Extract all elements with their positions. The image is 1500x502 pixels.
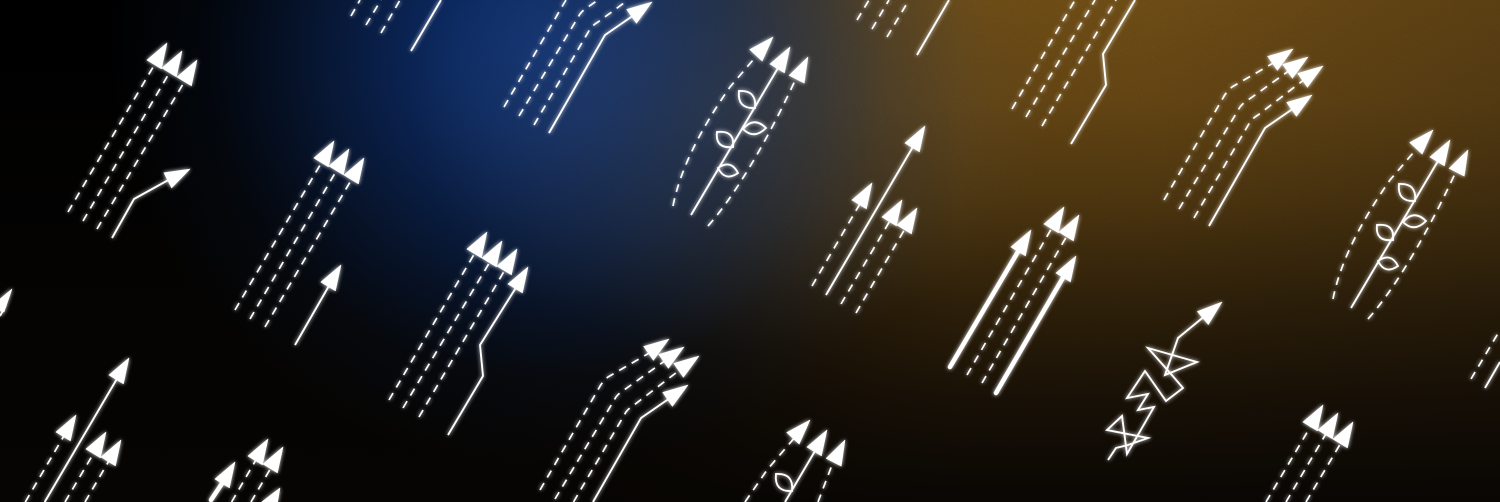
arrow group: two thick solid arrows with dashed lanes <box>950 203 1086 393</box>
arrow group: leaf stem with curved dashed lanes, right <box>1333 124 1476 319</box>
arrow group: lanes at right edge <box>1471 330 1500 388</box>
arrow group: curving lanes, top centre <box>504 0 657 133</box>
arrow group: curving lanes, bottom centre <box>540 332 704 502</box>
arrow: tangled zigzag line ending in arrowhead <box>1107 295 1227 460</box>
arrow group: long solid arrow among dashed lanes, bottom left <box>25 354 136 502</box>
arrow group: curving lanes, right <box>1164 42 1328 226</box>
arrow group: long solid arrow among dashed lanes, centre right <box>812 122 932 313</box>
arrow group: top edge dashed lanes with kinked solid line <box>1012 0 1135 144</box>
arrow group: top edge lanes near x=400 <box>351 0 441 51</box>
arrow group: leaf stem with curved dashed lanes, bottom <box>745 414 853 502</box>
arrow group: thick arrows at bottom left <box>211 435 290 502</box>
arrow group: three dashed lanes, one solid arrow veering right <box>68 39 204 238</box>
arrow group: dashed lanes with kinked solid arrow <box>389 228 535 435</box>
arrow: partial arrow at left edge <box>0 289 12 316</box>
arrow group: bottom edge lanes near x=1300 <box>1266 401 1360 502</box>
arrow group: top edge lanes near x=900 <box>857 0 949 55</box>
arrow group: leaf stem with curved dashed lanes, centre <box>673 31 816 226</box>
arrow group: three dashed lanes and a short solid arrow <box>235 137 371 345</box>
